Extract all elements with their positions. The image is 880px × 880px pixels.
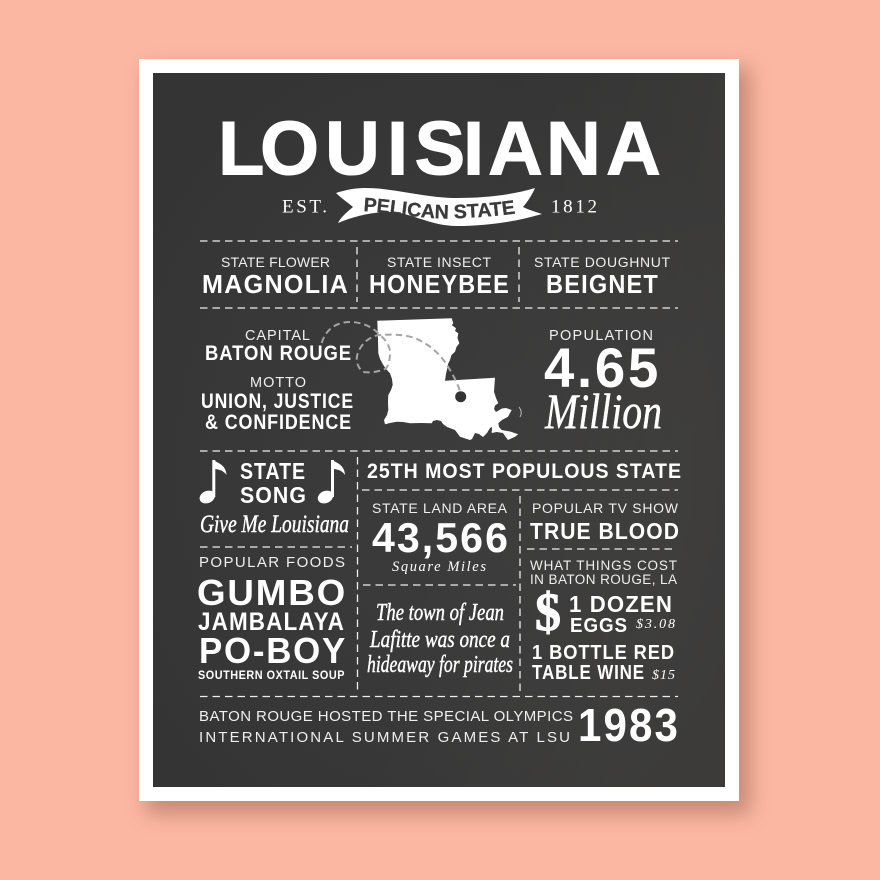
panel: popular foods: JAMBALAYA (198, 608, 345, 636)
panel: capital: BATON ROUGE (205, 342, 352, 365)
panel: capital (205, 328, 352, 365)
eggs price: $3.08 (636, 617, 675, 632)
icon: music note right (316, 460, 345, 506)
chalkboard panel (153, 73, 725, 787)
icon: music note left (198, 460, 226, 506)
panel: motto: UNION, JUSTICE (201, 390, 354, 413)
eggs price: EGGS (570, 615, 628, 637)
panel: fun fact: The town of Jean (376, 600, 504, 626)
panel: state flower: STATE FLOWER (221, 254, 330, 270)
heading: state song: STATE (240, 458, 306, 484)
wine price: TABLE WINE (532, 662, 645, 684)
icon: dollar sign: $ (535, 582, 561, 642)
panel: state flower (202, 254, 349, 299)
panel: state song (198, 458, 349, 538)
panel: cost of things (530, 558, 677, 684)
established label: EST. (282, 196, 327, 218)
panel: population: POPULATION (549, 328, 653, 344)
wine price: 1 BOTTLE RED (532, 642, 675, 664)
panel: land area (372, 500, 510, 575)
panel: population: Million (544, 383, 662, 439)
panel: cost of things: IN BATON ROUGE, LA (530, 572, 677, 587)
panel: special olympics: 1983 (578, 699, 680, 751)
panel: capital: CAPITAL (245, 328, 310, 344)
panel: state insect: STATE INSECT (387, 254, 491, 270)
song name: Give Me Louisiana (200, 511, 349, 538)
panel: fun fact (367, 600, 513, 678)
wine price: $15 (652, 668, 675, 683)
panel: population: 4.65 (544, 336, 661, 399)
panel: state song: SONG (240, 482, 307, 508)
panel: popular foods: POPULAR FOODS (199, 554, 345, 571)
panel: population (544, 328, 662, 439)
panel: motto (201, 375, 354, 434)
frame shadow (146, 68, 750, 814)
panel: popular foods (197, 554, 347, 682)
panel: popular foods: SOUTHERN OXTAIL SOUP (198, 668, 345, 682)
eggs price (569, 591, 675, 637)
panel: special olympics: BATON ROUGE HOSTED THE SPECIAL OLYMPICS (199, 708, 573, 725)
panel: fun fact: Lafitte was once a (369, 627, 510, 653)
panel: state doughnut (534, 254, 670, 299)
panel: land area: STATE LAND AREA (372, 500, 508, 516)
panel: motto: & CONFIDENCE (205, 411, 352, 434)
heading: 25th most populous state: 25TH MOST POPULOUS STATE (367, 460, 682, 483)
panel: state doughnut: STATE DOUGHNUT (534, 254, 670, 270)
white print border (139, 59, 739, 801)
banner: pelican state (336, 188, 542, 226)
wine price (532, 642, 675, 684)
panel: state insect (369, 254, 510, 299)
panel: popular foods: PO-BOY (199, 630, 347, 671)
dividers (200, 241, 678, 696)
panel: state doughnut: BEIGNET (546, 269, 659, 299)
panel: popular foods: GUMBO (197, 572, 347, 613)
banner: pelican state: PELICAN STATE (364, 198, 515, 219)
panel: land area: 43,566 (372, 514, 510, 561)
panel: special olympics: INTERNATIONAL SUMMER GAMES AT LSU (199, 729, 570, 746)
panel: popular tv show: TRUE BLOOD (530, 518, 680, 544)
established year: 1812 (551, 196, 597, 218)
map of Louisiana (322, 318, 521, 440)
panel: special olympics (199, 699, 680, 751)
panel: cost of things: WHAT THINGS COST (530, 558, 677, 573)
panel: popular tv show: POPULAR TV SHOW (532, 500, 679, 516)
title: LOUISIANA (218, 106, 661, 192)
panel: land area: Square Miles (392, 559, 486, 575)
panel: popular tv show (530, 500, 680, 544)
panel: state flower: MAGNOLIA (202, 269, 349, 299)
panel: motto: MOTTO (250, 375, 306, 391)
panel: state insect: HONEYBEE (369, 269, 510, 299)
eggs price: 1 DOZEN (569, 591, 673, 617)
panel: fun fact: hideaway for pirates (367, 652, 513, 678)
